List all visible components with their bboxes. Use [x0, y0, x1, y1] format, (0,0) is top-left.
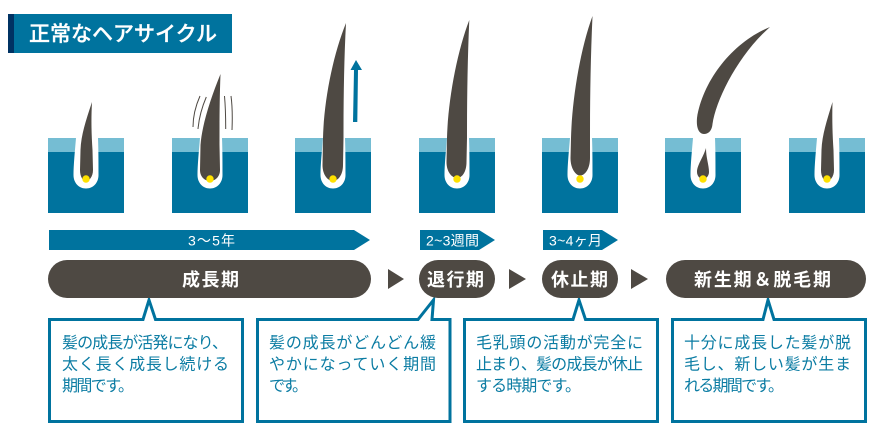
stage 5: telogen hair — [542, 16, 618, 213]
duration arrow: 3~4ヶ月 — [543, 230, 618, 250]
stage 6: shedding hair and new hair — [665, 27, 770, 213]
duration arrow: 3〜5年: 3〜5年 — [188, 232, 235, 248]
stage 1: short growing hair — [48, 102, 124, 213]
title banner: 正常なヘアサイクル — [29, 23, 217, 46]
callout: new growth and shedding phase: 十分に成長した髪が脱 — [684, 334, 851, 352]
phase pill: 休止期 — [542, 260, 618, 298]
callout: regression phase — [258, 300, 450, 422]
callout: growth phase — [50, 300, 242, 422]
callout: resting phase: する時期です。 — [476, 377, 581, 395]
stage 4: catagen hair — [419, 20, 495, 213]
stage 7: new short hair — [789, 102, 865, 213]
callout: resting phase: 毛乳頭の活動が完全に — [476, 334, 643, 352]
callout: growth phase: 期間です。 — [62, 377, 134, 395]
phase pill: 成長期: 成長期 — [182, 269, 239, 290]
duration arrow: 2~3週間: 2~3週間 — [426, 232, 479, 248]
callout: new growth and shedding phase: 毛し、新しい髪が生ま — [684, 356, 851, 374]
callout: new growth and shedding phase — [672, 300, 866, 422]
flow arrow 2 — [509, 269, 526, 289]
phase pill: 退行期 — [419, 260, 495, 298]
title banner — [8, 14, 232, 53]
phase pill: 成長期 — [48, 260, 371, 298]
phase pill: 休止期: 休止期 — [551, 270, 608, 290]
callout: growth phase: 髪の成長が活発になり、 — [62, 334, 228, 352]
callout: regression phase: 髪の成長がどんどん緩 — [269, 334, 436, 352]
callout: regression phase: です。 — [269, 377, 308, 395]
flow arrow 3 — [631, 269, 648, 289]
callout: growth phase: 太く長く成長し続ける — [62, 356, 229, 374]
phase pill: 新生期＆脱毛期 — [666, 260, 866, 298]
callout: regression phase: やかになっていく期間 — [269, 356, 436, 374]
callout: new growth and shedding phase: れる期間です。 — [684, 377, 784, 395]
stage 3: long hair with upward arrow — [295, 23, 371, 213]
duration arrow: 3~4ヶ月: 3~4ヶ月 — [549, 232, 602, 248]
stage 2: thickening hair with motion lines — [172, 74, 248, 213]
flow arrow 1 — [388, 269, 404, 289]
phase pill: 新生期＆脱毛期: 新生期＆脱毛期 — [694, 270, 831, 290]
icon: upward arrow — [350, 60, 362, 122]
duration arrow: 2~3週間 — [420, 230, 495, 250]
phase pill: 退行期: 退行期 — [427, 270, 484, 290]
callout: resting phase: 止まり、髪の成長が休止 — [476, 356, 643, 374]
callout: resting phase — [464, 300, 658, 422]
duration arrow: 3〜5年 — [49, 230, 370, 250]
